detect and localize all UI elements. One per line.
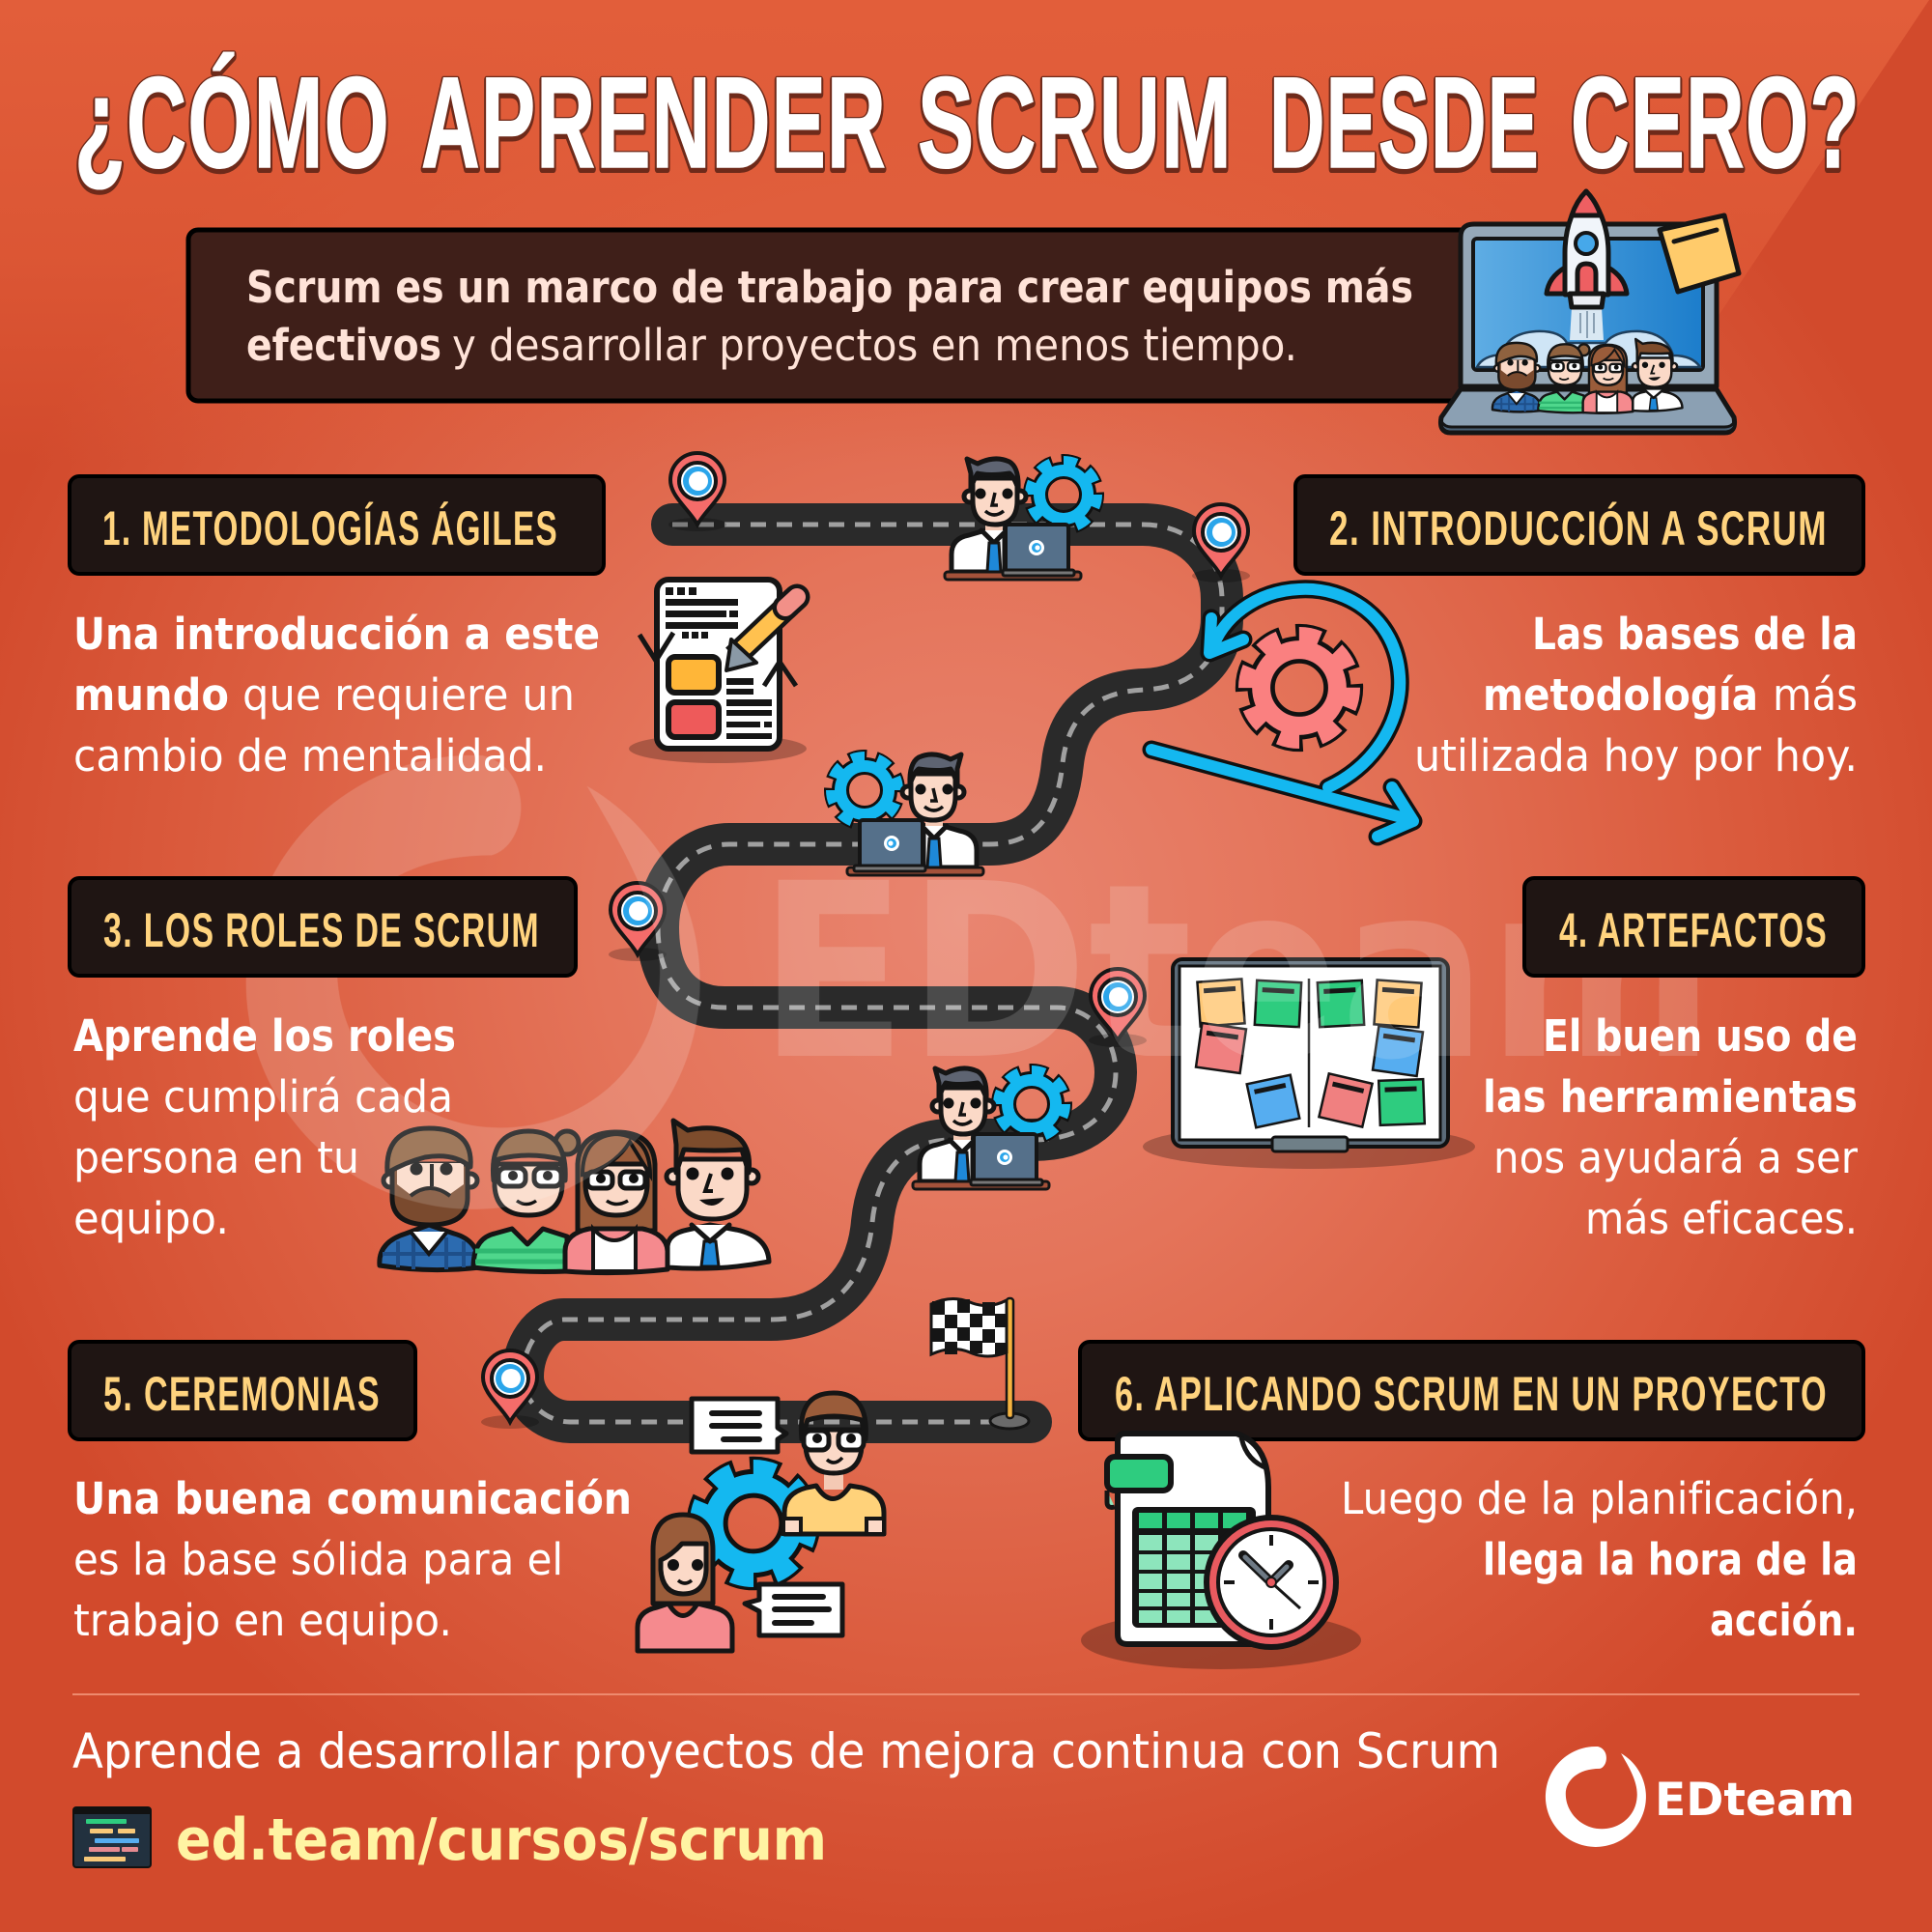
section 5: text: Una buena comunicación <box>73 1473 632 1524</box>
section 5: heading: 5. CEREMONIAS <box>103 1367 381 1421</box>
section 1: text: Una introducción a este <box>73 609 600 660</box>
section 6: heading <box>1080 1342 1863 1439</box>
section 2: text: más <box>1773 669 1858 721</box>
title: DESDE <box>1269 53 1540 197</box>
section 6: text: acción. <box>1710 1595 1858 1646</box>
section 1: text: mundo <box>73 669 229 721</box>
section 4: text: El buen uso de <box>1543 1010 1858 1062</box>
title: APRENDER <box>421 51 887 195</box>
icon: ceremony people, gear and speech bubbles <box>638 1393 884 1651</box>
section 1: text: que requiere un <box>242 669 575 721</box>
section 1: text <box>73 609 600 781</box>
icon: code window <box>73 1807 151 1867</box>
section 3: text: Aprende los roles <box>73 1010 456 1062</box>
section 2: heading <box>1295 476 1863 574</box>
footer link: ed.team/cursos/scrum <box>176 1806 827 1874</box>
icon: location pin 2 <box>1192 504 1250 582</box>
icon: location pin 3 <box>609 883 667 961</box>
section 4: text: las herramientas <box>1483 1071 1858 1122</box>
title: SCRUM <box>918 51 1233 195</box>
title: APRENDER <box>421 53 887 197</box>
section 2: text: Las bases de la <box>1532 609 1858 660</box>
section 1: text: cambio de mentalidad. <box>73 730 547 781</box>
section 5: text: es la base sólida para el <box>73 1534 563 1585</box>
road <box>523 525 1222 1422</box>
icon: kanban board with sticky notes <box>1143 959 1475 1169</box>
section 1: heading <box>70 476 604 574</box>
icon: location pin 1 <box>668 453 726 531</box>
icon: worker with laptop and gear, lower <box>913 1068 1065 1189</box>
section 2: text <box>1414 609 1858 781</box>
section 6: text <box>1341 1473 1858 1646</box>
icon: team of four people <box>380 1121 769 1273</box>
section 2: text: utilizada hoy por hoy. <box>1414 730 1858 781</box>
icon: location pin 4 <box>1089 969 1147 1047</box>
watermark: EDteam logo: EDteam <box>758 832 1715 1113</box>
icon: laptop with rocket and team <box>1440 191 1739 433</box>
icon: scrum iteration arrow and red gear <box>1151 589 1413 837</box>
section 5: text: trabajo en equipo. <box>73 1595 452 1646</box>
intro callout: efectivos <box>246 320 441 371</box>
section 5: heading <box>70 1342 415 1439</box>
icon: worker with laptop and gear, top <box>945 459 1097 580</box>
section 3: heading: 3. LOS ROLES DE SCRUM <box>103 903 540 957</box>
title <box>74 51 1861 197</box>
watermark: EDteam logo <box>246 755 1715 1209</box>
section 6: text: Luego de la planificación, <box>1341 1473 1858 1524</box>
section 1: heading: 1. METODOLOGÍAS ÁGILES <box>102 501 558 555</box>
footer call to action: Aprende a desarrollar proyectos de mejora continua con Scrum <box>72 1723 1500 1779</box>
title: DESDE <box>1269 51 1540 195</box>
icon: finish flag <box>931 1298 1029 1429</box>
section 5: text <box>73 1473 632 1646</box>
intro callout <box>188 230 1483 401</box>
intro callout: y desarrollar proyectos en menos tiempo. <box>452 320 1297 371</box>
section 3: text <box>73 1010 456 1244</box>
section 4: text: nos ayudará a ser <box>1493 1132 1858 1183</box>
title: SCRUM <box>918 53 1233 197</box>
title: ¿CÓMO <box>74 53 390 197</box>
icon: location pin 5 <box>481 1350 539 1429</box>
icon: worker with laptop and gear, middle mirrored <box>831 754 983 875</box>
title: ¿CÓMO <box>74 51 390 195</box>
section 3: text: persona en tu <box>73 1132 359 1183</box>
section 4: text: más eficaces. <box>1585 1193 1858 1244</box>
EDteam logo: EDteam <box>1655 1774 1855 1827</box>
intro callout: Scrum es un marco de trabajo para crear equipos más <box>246 262 1413 313</box>
section 4: text <box>1483 1010 1858 1244</box>
section 2: text: metodología <box>1483 669 1758 721</box>
section 3: heading <box>70 878 576 976</box>
section 3: text: equipo. <box>73 1193 229 1244</box>
section 6: text: llega la hora de la <box>1483 1534 1858 1585</box>
section 4: heading <box>1524 878 1863 976</box>
EDteam logo <box>1546 1747 1855 1847</box>
icon: spreadsheet with clock <box>1081 1434 1361 1669</box>
section 3: text: que cumplirá cada <box>73 1071 453 1122</box>
icon: document with pencil <box>629 580 807 763</box>
